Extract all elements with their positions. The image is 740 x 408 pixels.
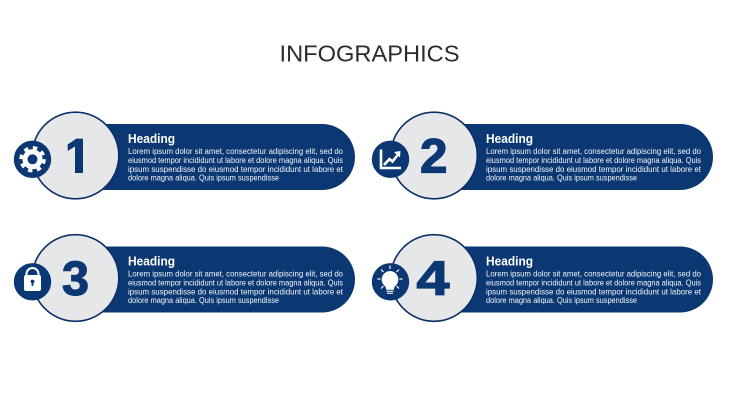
body text 4: Lorem ipsum dolor sit amet, consectetur adipiscing elit, sed do — [486, 270, 702, 278]
panel: item 3 — [14, 235, 355, 321]
number 2: 2 — [420, 130, 448, 184]
banner 3 — [75, 246, 355, 312]
body text 3: eiusmod tempor incididunt ut labore et dolore magna aliqua. Quis — [128, 278, 343, 288]
number 3: 3 — [62, 253, 89, 306]
number 4: 4 — [416, 253, 450, 306]
heading 4: Heading — [486, 254, 533, 268]
number 1 — [60, 130, 100, 184]
body text 4: eiusmod tempor incididunt ut labore et dolore magna aliqua. Quis — [486, 278, 701, 288]
body text 2: Lorem ipsum dolor sit amet, consectetur adipiscing elit, sed do — [486, 147, 702, 156]
icon: light bulb — [372, 263, 409, 300]
number 1: 1 — [65, 130, 92, 184]
banner 1 — [75, 124, 355, 190]
number circle 2 — [391, 112, 477, 199]
panel: item 1 — [14, 112, 355, 199]
heading 3: Heading — [128, 254, 175, 268]
title: INFOGRAPHICS — [280, 40, 460, 66]
banner 2 — [434, 124, 713, 190]
body text 2: dolore magna aliqua. Quis ipsum suspendisse — [486, 174, 638, 183]
icon: growth chart — [372, 141, 409, 178]
body text 2 — [486, 147, 702, 183]
number circle 4 — [391, 235, 477, 321]
icon: padlock — [14, 263, 51, 300]
banner 4 — [434, 246, 713, 312]
body text 1: dolore magna aliqua. Quis ipsum suspendisse — [128, 174, 280, 183]
body text 1: ipsum suspendisse do eiusmod tempor incididunt ut labore et — [128, 165, 344, 174]
body text 3: Lorem ipsum dolor sit amet, consectetur adipiscing elit, sed do — [128, 270, 344, 278]
body text 4 — [486, 270, 702, 305]
panel: item 2 — [372, 112, 713, 199]
heading 1: Heading — [128, 132, 175, 146]
icon: gear — [14, 141, 51, 178]
body text 4: ipsum suspendisse do eiusmod tempor incididunt ut labore et — [486, 288, 702, 296]
number circle 1 — [32, 112, 119, 199]
panel: item 4 — [372, 235, 713, 321]
body text 3: ipsum suspendisse do eiusmod tempor incididunt ut labore et — [128, 288, 344, 296]
body text 1: Lorem ipsum dolor sit amet, consectetur adipiscing elit, sed do — [128, 147, 344, 156]
body text 3: dolore magna aliqua. Quis ipsum suspendisse — [128, 296, 280, 305]
heading 2: Heading — [486, 132, 533, 146]
body text 2: ipsum suspendisse do eiusmod tempor incididunt ut labore et — [486, 165, 702, 174]
body text 1: eiusmod tempor incididunt ut labore et dolore magna aliqua. Quis — [128, 156, 343, 165]
body text 1 — [128, 147, 344, 183]
number circle 3 — [32, 235, 119, 321]
body text 3 — [128, 270, 344, 305]
body text 2: eiusmod tempor incididunt ut labore et dolore magna aliqua. Quis — [486, 156, 701, 165]
body text 4: dolore magna aliqua. Quis ipsum suspendisse — [486, 296, 638, 305]
